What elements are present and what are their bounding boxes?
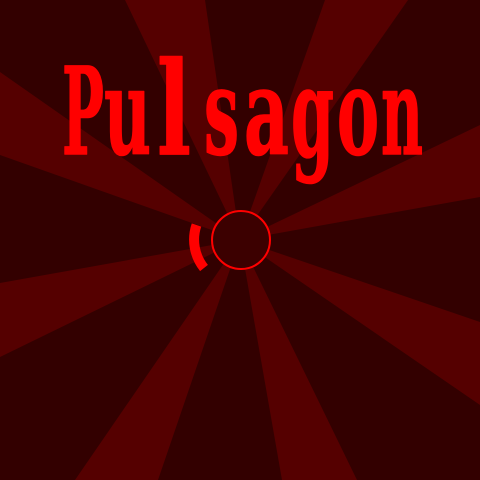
infographic canvas: n — [381, 42, 423, 183]
title: a — [244, 42, 289, 183]
title: g — [291, 41, 334, 186]
central circle — [212, 211, 270, 269]
title — [62, 35, 423, 186]
title: o — [337, 42, 379, 183]
title: P — [62, 40, 104, 183]
title: l — [157, 35, 191, 185]
title: u — [104, 42, 151, 183]
title: s — [204, 42, 239, 183]
orbiting arc — [194, 225, 204, 268]
